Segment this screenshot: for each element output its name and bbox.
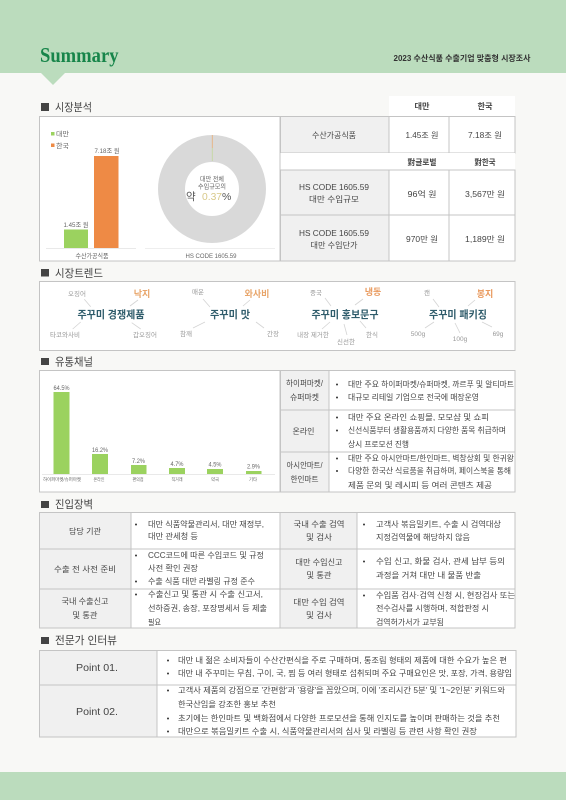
bar chart: processed seafood xyxy=(46,146,136,260)
title: Summary xyxy=(40,43,119,67)
section heading: expert interview: 전문가 인터뷰 xyxy=(55,634,117,647)
table: expert interview: 초기에는 한인마트 및 백화점에서 다양한 프로모션을 통해 인지도를 높이며 판매하는 것을 추천 xyxy=(178,713,500,723)
panel: channel bar chart: 4.7% xyxy=(170,461,184,468)
panel: channel bar chart xyxy=(40,370,280,492)
keyword cluster: packaging: 봉지 xyxy=(477,289,493,299)
keyword cluster: promotional copy: 내장 제거한 xyxy=(297,330,329,339)
section heading: market trends xyxy=(41,267,103,280)
panel: market charts xyxy=(40,116,280,261)
table: entry barriers: 및 통관 xyxy=(306,570,332,580)
table: market figures: 대만 수입규모 xyxy=(309,195,359,204)
table: channel descriptions: 슈퍼마켓 xyxy=(290,392,319,402)
keyword cluster: packaging: 500g xyxy=(411,331,426,338)
table: entry barriers: 수출 식품 대만 라벨링 규정 준수 xyxy=(148,576,255,586)
table: entry barriers: 고객사 볶음밀키트, 수출 시 검역대상 xyxy=(376,519,502,529)
keyword cluster: competing products: 오징어 xyxy=(68,289,86,298)
table: market figures: 對글로벌 xyxy=(408,157,436,167)
keyword cluster: taste: 매운 xyxy=(192,288,204,296)
table: market figures: 970만 원 xyxy=(406,235,438,244)
table: entry barriers: 대만 식품약물관리서, 대만 재정부, xyxy=(148,519,264,529)
donut chart: HS CODE 1605.59 xyxy=(186,253,237,260)
table: channel descriptions: 신선식품부터 생활용품까지 다양한 품목 취급하며 xyxy=(348,425,506,435)
section heading: market trends: 시장트렌드 xyxy=(55,267,103,280)
table: entry barriers: 전수검사를 시행하며, 적합판정 시 xyxy=(376,603,489,613)
keyword cluster: taste: 참깨 xyxy=(180,329,192,338)
keyword cluster: competing products xyxy=(50,288,157,339)
table: entry barriers: 국내 수출신고 xyxy=(62,596,108,606)
table: entry barriers: 수입 신고, 화물 검사, 관세 납부 등의 xyxy=(376,556,505,566)
table: market figures: 1.45조 원 xyxy=(406,131,438,140)
panel: channel bar chart: 64.5% xyxy=(54,385,70,392)
table: expert interview: Point 02. xyxy=(76,707,118,718)
donut chart: 수입규모의 xyxy=(198,182,226,190)
table: entry barriers: CCC코드에 따른 수입코드 및 규정 xyxy=(148,550,264,560)
table: market figures: 1,189만 원 xyxy=(465,235,505,244)
table: channel descriptions: 온라인 xyxy=(292,426,314,436)
panel: channel bar chart: 16.2% xyxy=(92,447,108,454)
legend xyxy=(51,129,69,150)
footer band xyxy=(0,772,566,800)
keyword cluster: competing products: 갑오징어 xyxy=(133,330,157,339)
keyword cluster: promotional copy: 냉동 xyxy=(365,286,381,297)
keyword cluster: packaging: 캔 xyxy=(424,288,430,297)
table: entry barriers: 대만 관세청 등 xyxy=(148,531,198,541)
keyword cluster: promotional copy: 한식 xyxy=(366,330,378,339)
keyword cluster: competing products: 주꾸미 경쟁제품 xyxy=(78,308,145,321)
donut chart: 약 xyxy=(186,191,196,203)
table: market figures: 對한국 xyxy=(474,157,496,167)
table: entry barriers: 수입품 검사·검역 신청 시, 현장검사 또는 xyxy=(376,590,515,600)
panel: market trends xyxy=(40,282,515,350)
table: expert interview: 대만으로 볶음밀키트 수출 시, 식품약물관리서의 심사 및 라벨링 등 관련 사항 확인 권장 xyxy=(178,726,478,736)
keyword cluster: promotional copy xyxy=(297,286,381,346)
table: market figures: 한국 xyxy=(478,101,493,111)
table: entry barriers: 및 통관 xyxy=(72,610,98,620)
panel: channel bar chart: 2.9% xyxy=(247,464,260,470)
table: expert interview xyxy=(40,650,516,737)
keyword cluster: promotional copy: 신선한 xyxy=(337,337,355,346)
keyword cluster: competing products: 낙지 xyxy=(134,288,150,299)
table: channel descriptions: 한인마트 xyxy=(290,474,318,484)
keyword cluster: promotional copy: 주꾸미 홍보문구 xyxy=(312,308,379,321)
table: channel descriptions xyxy=(280,370,515,492)
table: market figures: 3,567만 원 xyxy=(465,190,505,199)
keyword cluster: taste: 와사비 xyxy=(245,288,269,299)
section heading: distribution channels: 유통채널 xyxy=(55,356,93,368)
table: market figures: 수산가공식품 xyxy=(312,130,356,140)
table: entry barriers: 검역허가서가 교부됨 xyxy=(376,617,444,627)
section heading: entry barriers: 진입장벽 xyxy=(55,498,93,511)
table: channel descriptions: 아시안마트/ xyxy=(286,460,323,470)
table: market figures: 96억 원 xyxy=(408,189,436,199)
keyword cluster: promotional copy: 중국 xyxy=(310,289,322,297)
donut chart xyxy=(145,135,275,260)
table: expert interview: Point 01. xyxy=(76,663,118,674)
report name: 2023 수산식품 수출기업 맞춤형 시장조사 xyxy=(394,53,531,63)
table: market figures: 7.18조 원 xyxy=(468,131,502,140)
table: market figures xyxy=(280,96,515,261)
section heading: distribution channels xyxy=(41,356,93,368)
table: expert interview: 대만 내 젊은 소비자들이 수산간편식을 주로 구매하며, 통조림 형태의 제품에 대한 수요가 높은 편 xyxy=(178,655,507,665)
section heading: market analysis xyxy=(41,101,92,114)
table: entry barriers: 수출신고 및 통관 시 수출 신고서, xyxy=(148,589,263,599)
table: entry barriers: 필요 xyxy=(148,617,161,627)
keyword cluster: packaging: 주꾸미 패키징 xyxy=(429,308,487,321)
keyword cluster: packaging: 100g xyxy=(453,336,468,343)
table: entry barriers: 및 검사 xyxy=(306,532,333,542)
section heading: market analysis: 시장분석 xyxy=(55,101,92,114)
table: entry barriers: 과정을 거쳐 대만 내 물품 반출 xyxy=(376,570,481,580)
table: entry barriers: 대만 수입신고 xyxy=(296,558,342,567)
panel: channel bar chart: 기타 xyxy=(249,476,258,483)
table: entry barriers: 사전 확인 권장 xyxy=(148,563,199,573)
donut chart: 0.37 xyxy=(202,191,222,203)
keyword cluster: taste: 간장 xyxy=(267,329,279,338)
header band xyxy=(0,0,566,85)
legend: 대만 xyxy=(56,129,69,138)
bar chart: processed seafood: 1.45조 원 xyxy=(64,220,89,229)
table: market figures: 대만 xyxy=(414,101,430,111)
table: channel descriptions: 대규모 리테일 기업으로 전국에 매장운영 xyxy=(348,392,479,402)
table: channel descriptions: 하이퍼마켓/ xyxy=(286,378,324,388)
table: entry barriers xyxy=(40,512,515,628)
table: market figures: 대만 수입단가 xyxy=(310,240,358,250)
table: expert interview: 대만 내 주꾸미는 무침, 구이, 국, 찜 등 여러 형태로 섭취되며 주요 구매요인은 맛, 포장, 가격, 용량임 xyxy=(178,668,512,678)
table: entry barriers: 대만 수입 검역 xyxy=(294,597,344,607)
keyword cluster: packaging xyxy=(411,288,504,343)
panel: channel bar chart: 직거래 xyxy=(172,476,182,483)
table: entry barriers: 지정검역물에 해당하지 않음 xyxy=(376,532,470,542)
table: channel descriptions: 대만 주요 하이퍼마켓/슈퍼마켓, 까르푸 및 알티마트 xyxy=(348,379,514,389)
panel: channel bar chart: 7.2% xyxy=(132,458,145,465)
table: channel descriptions: 상시 프로모션 진행 xyxy=(348,439,409,449)
donut chart: 대만 전체 xyxy=(200,174,224,183)
table: entry barriers: 선하증권, 송장, 포장명세서 등 제출 xyxy=(148,603,267,613)
keyword cluster: taste xyxy=(180,288,279,338)
table: channel descriptions: 대만 주요 온라인 쇼핑몰, 모모샵 및 쇼피 xyxy=(348,412,489,422)
legend: 한국 xyxy=(56,142,69,150)
panel: channel bar chart: 약국 xyxy=(211,476,219,483)
panel: channel bar chart: 하이퍼마켓/슈퍼마켓 xyxy=(43,476,81,483)
table: entry barriers: 및 검사 xyxy=(306,610,333,620)
panel: channel bar chart: 4.5% xyxy=(208,462,222,468)
panel: channel bar chart: 편의점 xyxy=(132,476,144,483)
keyword cluster: packaging: 69g xyxy=(493,331,504,338)
table: entry barriers: 담당 기관 xyxy=(69,526,102,536)
table: expert interview: 고객사 제품의 강점으로 '간편함'과 '용량'을 꼽았으며, 이에 '조리시간 5분' 및 '1~2인분' 키워드와 xyxy=(178,685,506,695)
table: entry barriers: 수출 전 사전 준비 xyxy=(54,564,116,574)
table: market figures: HS CODE 1605.59 xyxy=(299,183,370,192)
table: channel descriptions: 대만 주요 아시안마트/한인마트, 벽창상회 및 한귀왕 xyxy=(348,453,515,463)
bar chart: processed seafood: 7.18조 원 xyxy=(94,146,120,155)
panel: channel bar chart: 온라인 xyxy=(94,476,104,483)
keyword cluster: taste: 주꾸미 맛 xyxy=(210,308,250,321)
donut chart: % xyxy=(222,191,231,203)
section heading: entry barriers xyxy=(41,498,93,511)
table: channel descriptions: 다양한 한국산 식료품을 취급하며, 페이스북을 통해 xyxy=(348,466,511,476)
table: market figures: HS CODE 1605.59 xyxy=(299,229,370,238)
keyword cluster: competing products: 타코와사비 xyxy=(50,330,80,339)
table: expert interview: 한국산임을 강조한 홍보 추천 xyxy=(178,699,276,709)
bar chart: processed seafood: 수산가공식품 xyxy=(76,251,109,260)
table: entry barriers: 국내 수출 검역 xyxy=(294,519,344,529)
table: channel descriptions: 제품 문의 및 레시피 등 여러 콘텐츠 제공 xyxy=(348,480,492,490)
